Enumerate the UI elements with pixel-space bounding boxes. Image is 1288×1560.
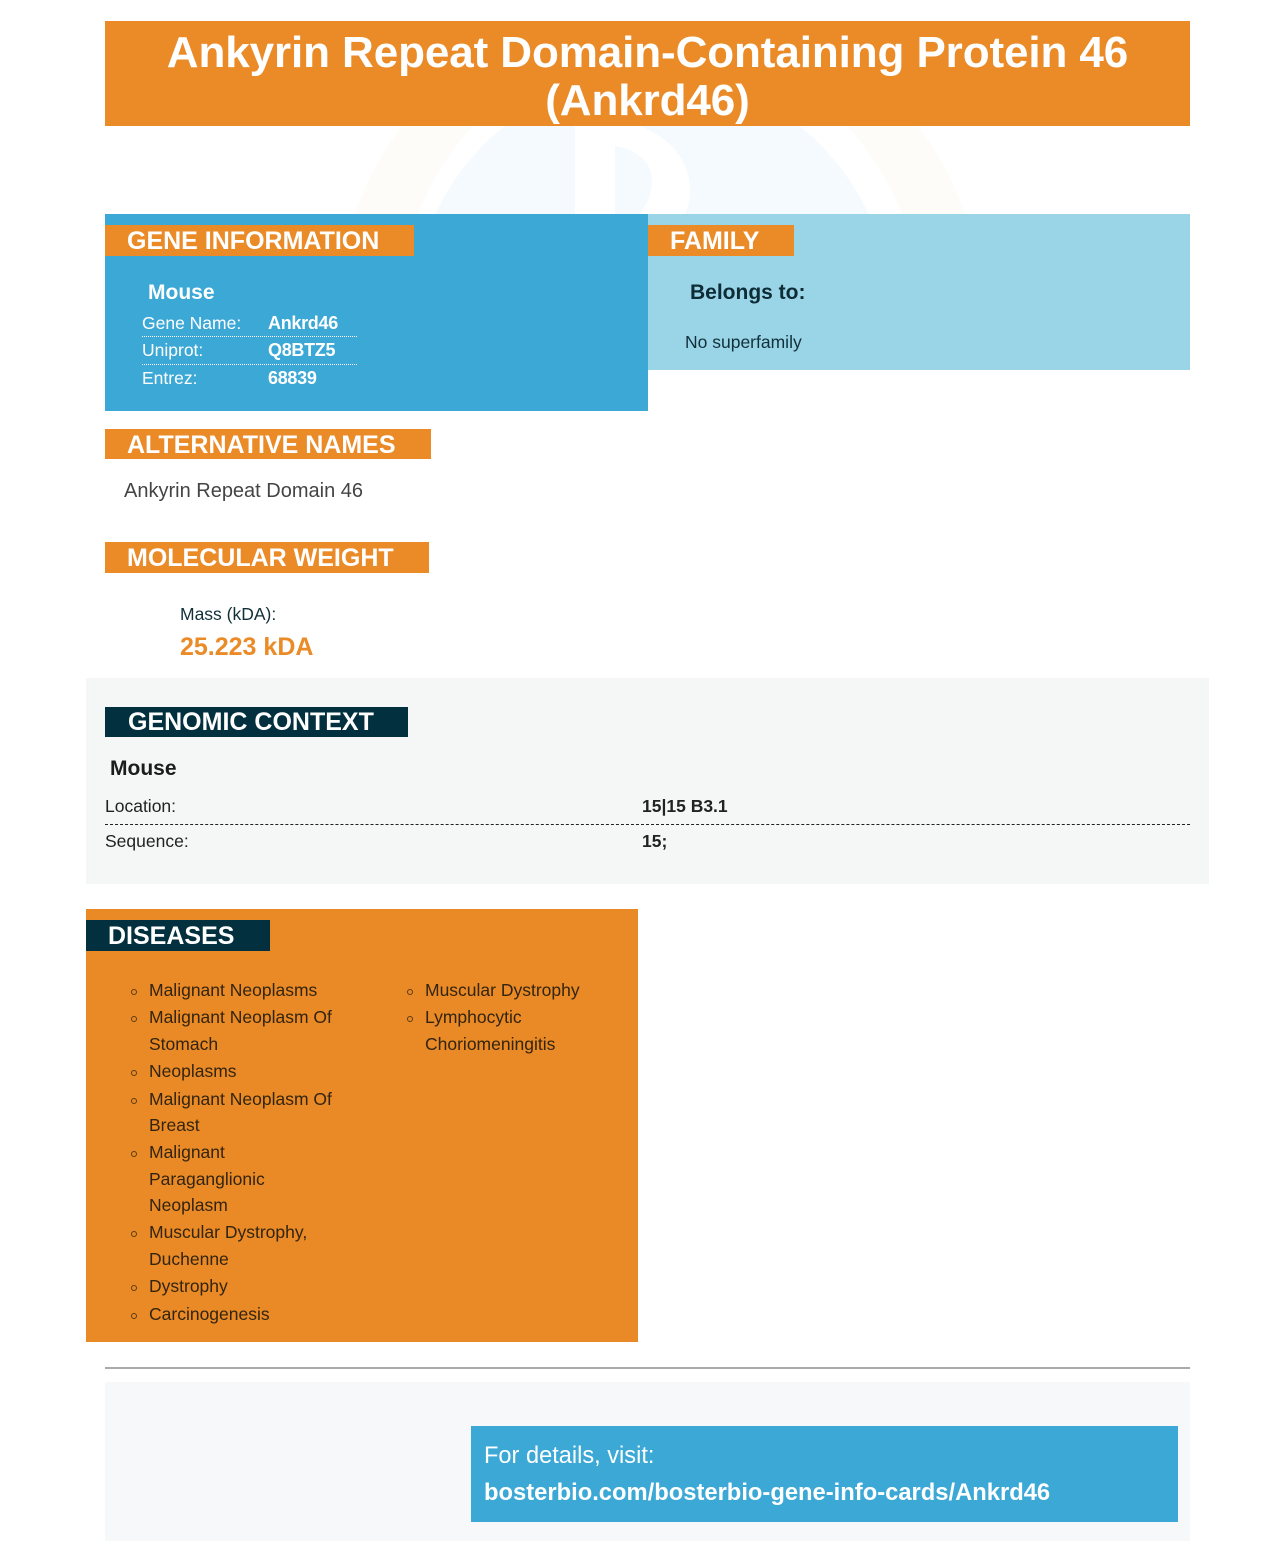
family subheading: Belongs to: [690, 281, 806, 304]
gene info table: Ankrd46 [268, 313, 338, 333]
callout: details link [471, 1426, 1178, 1522]
family text: No superfamily [685, 332, 802, 352]
disease list column 1: Neoplasm [149, 1195, 228, 1215]
disease list column 2 [407, 980, 580, 1054]
disease list column 1: Neoplasms [149, 1061, 237, 1081]
disease list column 1: Dystrophy [149, 1276, 228, 1296]
panel: footer [105, 1382, 1190, 1541]
genomic table: Location: [105, 796, 176, 816]
gene info table: Entrez: [142, 368, 197, 388]
gene info table: Uniprot: [142, 340, 203, 360]
disease list column 2: Choriomeningitis [425, 1034, 555, 1054]
alternative names text: Ankyrin Repeat Domain 46 [124, 480, 363, 502]
callout: details link: For details, visit: [484, 1443, 654, 1469]
disease list column 1: Malignant Neoplasms [149, 980, 317, 1000]
title banner: (Ankrd46) [545, 76, 750, 125]
genomic table [105, 796, 1190, 851]
disease list column 1 [131, 980, 332, 1324]
disease list column 1: Stomach [149, 1034, 218, 1054]
disease list column 2: Lymphocytic [425, 1007, 522, 1027]
genomic table: 15|15 B3.1 [642, 796, 728, 816]
heading: molecular weight: MOLECULAR WEIGHT [127, 544, 394, 572]
genomic species label: Mouse [110, 757, 177, 780]
panel: diseases [86, 909, 638, 1342]
genomic table: 15; [642, 831, 667, 851]
disease list column 1: Malignant Neoplasm Of [149, 1007, 332, 1027]
heading: genomic context: GENOMIC CONTEXT [128, 708, 374, 736]
heading: diseases [86, 920, 270, 951]
disease list column 2: Muscular Dystrophy [425, 980, 580, 1000]
mass value: 25.223 kDA [180, 633, 313, 661]
disease list column 1: Breast [149, 1115, 200, 1135]
heading: diseases: DISEASES [108, 922, 234, 950]
gene info table [142, 313, 357, 388]
panel: gene information [105, 214, 648, 411]
disease list column 1: Malignant Neoplasm Of [149, 1089, 332, 1109]
callout: details link: bosterbio.com/bosterbio-gene-info-cards/Ankrd46 [484, 1479, 1050, 1506]
panel: genomic context [86, 678, 1209, 884]
title banner: Ankyrin Repeat Domain-Containing Protein 46 [167, 28, 1128, 77]
heading: alternative names: ALTERNATIVE NAMES [127, 431, 396, 459]
heading: family: FAMILY [670, 227, 759, 255]
heading: gene information: GENE INFORMATION [127, 227, 379, 255]
genomic table: Sequence: [105, 831, 189, 851]
mass label: Mass (kDA): [180, 604, 276, 624]
disease list column 1: Muscular Dystrophy, [149, 1222, 307, 1242]
heading: family [648, 225, 794, 256]
disease list column 1: Paraganglionic [149, 1169, 265, 1189]
gene info table: Q8BTZ5 [268, 340, 335, 360]
background watermark logo [436, 126, 868, 214]
species label: Mouse [148, 281, 215, 304]
disease list column 1: Malignant [149, 1142, 225, 1162]
gene info table: Gene Name: [142, 313, 241, 333]
title banner [105, 21, 1190, 126]
disease list column 1: Carcinogenesis [149, 1304, 270, 1324]
panel: family [648, 214, 1190, 370]
gene info table: 68839 [268, 368, 317, 388]
disease list column 1: Duchenne [149, 1249, 229, 1269]
